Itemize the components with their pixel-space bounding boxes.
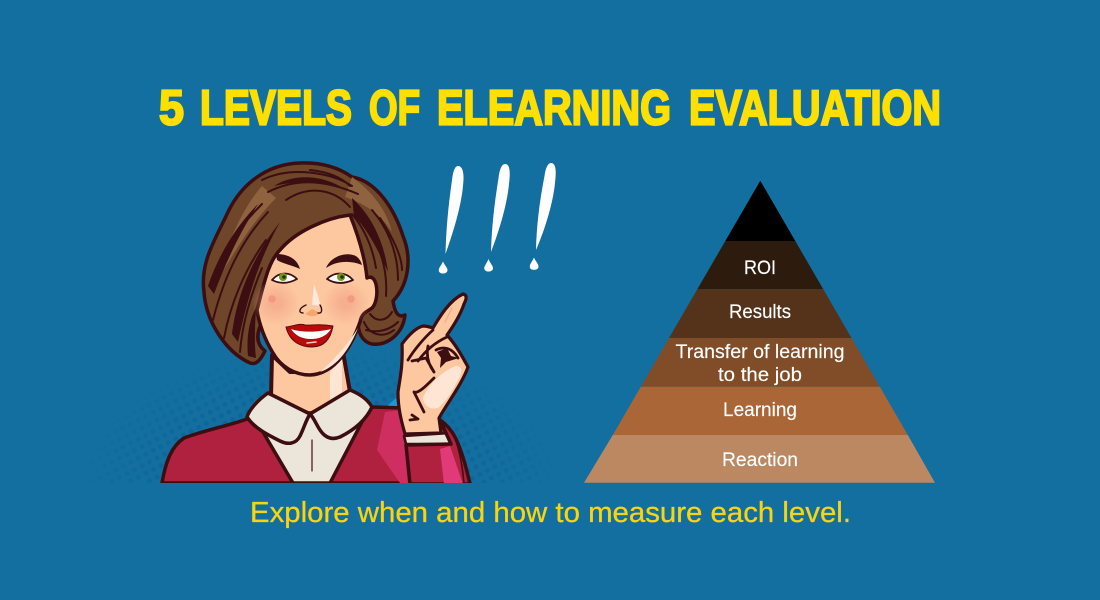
right collar	[310, 390, 372, 438]
level: Results	[669, 289, 852, 338]
exclamation 1	[439, 166, 464, 274]
mouth	[286, 324, 333, 347]
small light blue accent	[388, 398, 398, 406]
title: 5	[159, 82, 184, 136]
neck	[271, 352, 350, 414]
level: Reaction: Reaction	[722, 450, 798, 471]
level: ROI	[697, 241, 823, 289]
title: ELEARNING	[437, 82, 671, 136]
level: Transfer of learning to the job: Transfer of learning	[676, 342, 844, 363]
cuff	[404, 433, 451, 444]
level: ROI: ROI	[744, 258, 776, 279]
level: Results: Results	[729, 302, 791, 323]
sleeve	[406, 420, 470, 484]
level: Learning	[613, 387, 908, 435]
level: Learning: Learning	[723, 400, 797, 421]
left collar	[247, 393, 310, 443]
exclamation marks	[439, 163, 556, 274]
exclamation 3	[530, 163, 556, 270]
face	[257, 215, 377, 375]
subtitle: Explore when and how to measure each level.	[250, 497, 851, 529]
illustration: woman pointing up	[162, 163, 470, 484]
right eye	[327, 273, 353, 283]
cheek spots	[268, 295, 355, 303]
neck highlight	[330, 358, 342, 400]
hand	[398, 294, 468, 434]
level: Transfer of learning to the job: to the job	[718, 365, 802, 386]
left cheek	[254, 284, 294, 320]
nose	[300, 284, 322, 316]
infographic canvas	[154, 88, 940, 528]
level: Transfer of learning to the job	[641, 338, 880, 387]
right cheek	[328, 286, 368, 321]
title: LEVELS	[200, 82, 352, 136]
exclamation 2	[484, 164, 510, 272]
title: EVALUATION	[689, 82, 941, 136]
left eyebrow	[276, 254, 300, 269]
jaw highlight	[320, 328, 358, 372]
shirt placket line	[311, 440, 313, 471]
hair back	[203, 163, 408, 364]
right eyebrow	[326, 254, 362, 268]
halftone dots behind figure	[154, 392, 486, 483]
left eye	[272, 273, 297, 283]
sweater light panel	[377, 410, 408, 483]
title: OF	[369, 82, 420, 136]
shirt	[260, 414, 363, 483]
pyramid apex	[725, 181, 795, 241]
sweater body	[162, 407, 470, 483]
level: Reaction	[584, 435, 935, 483]
pyramid chart	[584, 181, 935, 483]
